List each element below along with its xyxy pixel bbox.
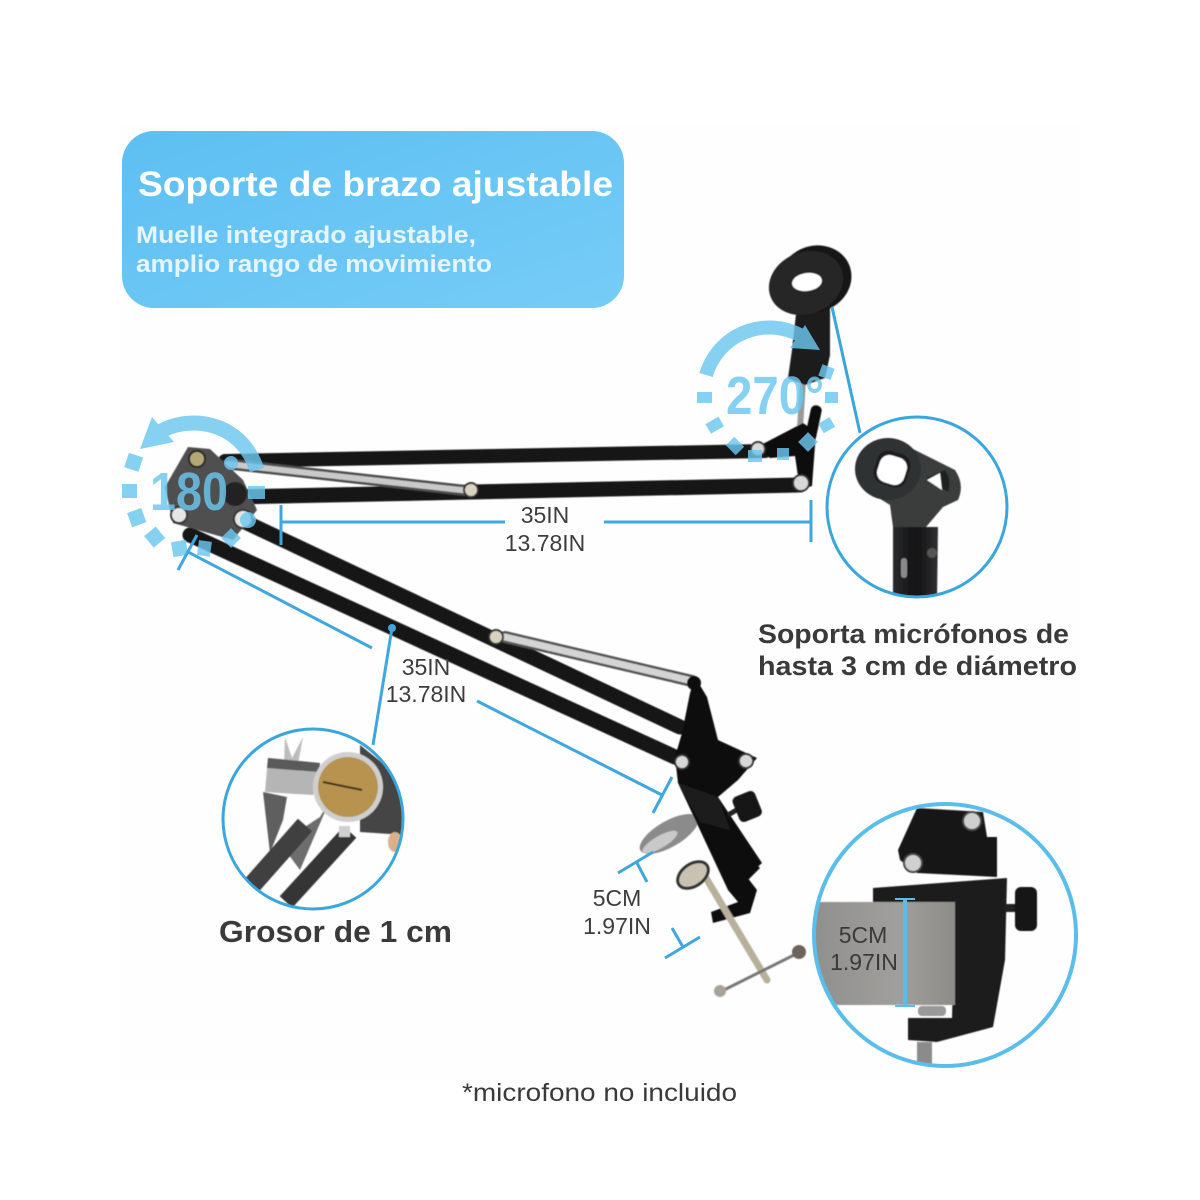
callout: clamp detail: 5CM bbox=[839, 922, 887, 948]
lower arm bbox=[190, 522, 692, 757]
heading: Soporte de brazo ajustable bbox=[138, 165, 613, 204]
microphone clip and swivel bbox=[751, 235, 862, 491]
front ring bbox=[855, 438, 921, 500]
callout label: microphone diameter: Soporta micrófonos de bbox=[758, 619, 1069, 649]
dimension: lower arm length: 13.78IN bbox=[386, 681, 466, 707]
callout: arm thickness caliper bbox=[223, 624, 410, 909]
callout label: microphone diameter bbox=[758, 619, 1077, 681]
dimension: clamp opening: 5CM bbox=[593, 885, 641, 911]
dimension: lower arm length: 35IN bbox=[402, 654, 450, 680]
dimension: clamp opening bbox=[583, 852, 700, 958]
270 degree rotation indicator bbox=[697, 325, 838, 462]
callout label: thickness: Grosor de 1 cm bbox=[219, 914, 452, 949]
rear window bbox=[926, 470, 949, 492]
clamp bracket bbox=[634, 676, 763, 923]
subheading: amplio rango de movimiento bbox=[136, 251, 492, 278]
270 degree rotation indicator: 270° bbox=[726, 366, 824, 426]
infographic canvas bbox=[122, 131, 1078, 1101]
footnote: *microfono no incluido bbox=[462, 1079, 737, 1107]
panel: header bbox=[122, 131, 624, 308]
callout: clamp detail bbox=[813, 804, 1076, 1072]
clip sleeve bbox=[880, 448, 962, 528]
callout label: microphone diameter: hasta 3 cm de diámetro bbox=[758, 651, 1077, 681]
callout: clamp detail: 1.97IN bbox=[830, 949, 898, 975]
dimension: lower arm length bbox=[178, 535, 672, 813]
subheading bbox=[136, 222, 492, 278]
clamp screw bbox=[673, 856, 806, 997]
dimension: clamp opening: 1.97IN bbox=[583, 913, 651, 939]
dimension: upper arm length: 35IN bbox=[521, 502, 569, 528]
subheading: Muelle integrado ajustable, bbox=[136, 222, 476, 249]
boom arm bbox=[165, 235, 862, 997]
dimension: upper arm length bbox=[281, 500, 811, 556]
upper arm bbox=[225, 451, 800, 497]
180 degree rotation indicator: 180 bbox=[150, 462, 228, 522]
callout: microphone clip detail bbox=[827, 307, 1007, 600]
180 degree rotation indicator bbox=[122, 417, 265, 557]
head plate bbox=[165, 447, 257, 540]
dimension: upper arm length: 13.78IN bbox=[505, 530, 585, 556]
